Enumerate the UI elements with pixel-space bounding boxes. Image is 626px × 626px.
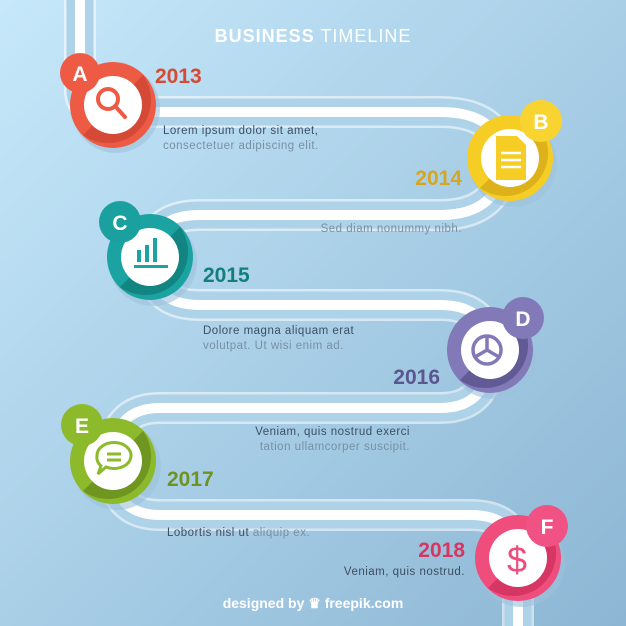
milestone A bbox=[60, 53, 160, 153]
text 2016: Veniam, quis nostrud exerci bbox=[255, 426, 410, 438]
text 2018: Veniam, quis nostrud. bbox=[344, 566, 465, 578]
title: BUSINESS TIMELINE bbox=[215, 26, 411, 46]
text 2014 bbox=[321, 167, 462, 235]
text 2015: Dolore magna aliquam erat bbox=[203, 325, 355, 337]
milestone C bbox=[99, 201, 197, 306]
text 2013: 2013 bbox=[155, 65, 202, 88]
text 2017: 2017 bbox=[167, 468, 214, 491]
text 2013: Lorem ipsum dolor sit amet, bbox=[163, 125, 318, 137]
milestone B: B bbox=[533, 111, 549, 134]
milestone E: E bbox=[75, 415, 89, 438]
text 2013: consectetuer adipiscing elit. bbox=[163, 140, 319, 152]
milestone F: F bbox=[541, 516, 554, 539]
text 2015 bbox=[203, 264, 355, 352]
icon: dollar: $ bbox=[507, 539, 527, 580]
icon: wheel bbox=[473, 336, 501, 364]
icon: magnifier bbox=[98, 89, 125, 117]
text 2015: 2015 bbox=[203, 264, 250, 287]
milestone B bbox=[467, 100, 562, 207]
text 2018 bbox=[344, 539, 465, 578]
text 2018: 2018 bbox=[418, 539, 465, 562]
milestone C: C bbox=[112, 212, 128, 235]
text 2017: Lobortis nisl ut aliquip ex. bbox=[167, 527, 310, 539]
text 2015: volutpat. Ut wisi enim ad. bbox=[203, 340, 344, 352]
text 2016 bbox=[255, 366, 440, 453]
milestone D: D bbox=[515, 308, 531, 331]
milestone F bbox=[475, 505, 568, 607]
text 2014: 2014 bbox=[415, 167, 462, 190]
text 2016: 2016 bbox=[393, 366, 440, 389]
icon: speech bubble bbox=[97, 443, 131, 474]
text 2016: tation ullamcorper suscipit. bbox=[260, 441, 410, 453]
text 2013 bbox=[155, 65, 319, 152]
icon: document bbox=[496, 136, 526, 180]
footer credit: designed by ♛ freepik.com bbox=[223, 595, 403, 611]
milestone D bbox=[447, 297, 544, 399]
text 2017 bbox=[167, 468, 310, 539]
road path bbox=[80, 0, 518, 626]
icon: bar chart bbox=[134, 238, 168, 268]
milestone E bbox=[61, 404, 161, 510]
text 2014: Sed diam nonummy nibh. bbox=[321, 223, 462, 235]
milestone A: A bbox=[72, 63, 88, 86]
